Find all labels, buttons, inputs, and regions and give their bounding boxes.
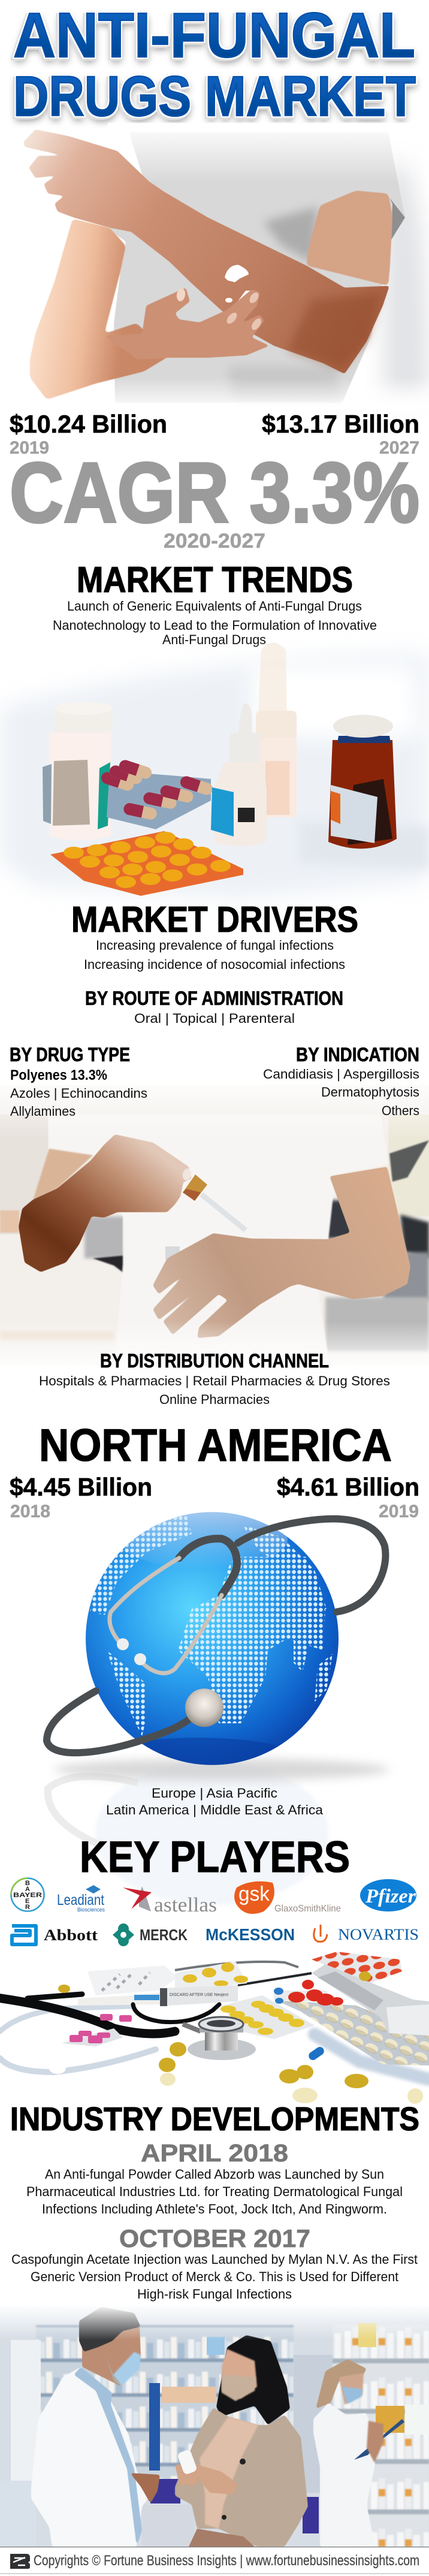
development: October 2017: Caspofungin Acetate Injection was Launched by Mylan N.V. As the First — [11, 2252, 418, 2267]
CAGR period: 2020-2027 — [164, 530, 265, 552]
globe with stethoscope — [47, 1511, 385, 1774]
north america 2019 — [277, 1473, 419, 1521]
market trends heading: MARKET TRENDS — [77, 560, 353, 600]
by route of administration: BY ROUTE OF ADMINISTRATION — [85, 987, 343, 1009]
tall clear bottle — [256, 642, 297, 817]
north america heading: NORTH AMERICA — [39, 1420, 392, 1471]
market trends list: Launch of Generic Equivalents of Anti-Fungal Drugs — [67, 599, 362, 614]
left hand holding dropper — [19, 1134, 192, 1272]
logo: Leadiant: Biosciences — [77, 1907, 105, 1913]
development: April 2018: APRIL 2018 — [141, 2139, 288, 2167]
black tube — [0, 1994, 219, 2034]
north america 2018 — [10, 1473, 152, 1521]
logo: Novartis: NOVARTIS — [338, 1926, 419, 1943]
other regions: Latin America | Middle East & Africa — [106, 1802, 324, 1817]
by distribution channel: BY DISTRIBUTION CHANNEL — [100, 1350, 329, 1372]
logo: Pfizer: Pfizer — [365, 1886, 416, 1907]
pharmacist man — [31, 2307, 160, 2547]
development: October 2017 — [11, 2224, 418, 2302]
market size 2019: 2019 — [10, 438, 49, 458]
logo: Bayer: B — [25, 1880, 30, 1887]
right arm and hand — [153, 1167, 410, 1338]
by indication: Candidiasis | Aspergillosis — [263, 1067, 419, 1082]
logo: Merck — [113, 1923, 188, 1946]
logo: Pfizer — [360, 1879, 416, 1911]
market trends list: Nanotechnology to Lead to the Formulation of Innovative — [53, 618, 377, 633]
market drivers list: Increasing incidence of nosocomial infections — [84, 957, 345, 972]
logo: Abbott — [12, 1926, 98, 1944]
red tablet blister — [312, 1952, 402, 1983]
floor reflections — [0, 2006, 429, 2085]
other regions — [106, 1786, 324, 1817]
logo: astellas: astellas — [154, 1894, 217, 1916]
by drug type: Allylamines — [10, 1104, 75, 1119]
shirt — [50, 1135, 388, 1352]
stethoscope chest piece — [183, 2017, 256, 2060]
logo: Abbott: Abbott — [44, 1926, 98, 1944]
logo: Bayer: A — [25, 1886, 30, 1893]
market trends list: Anti-Fungal Drugs — [162, 632, 266, 647]
yellow pill blister top — [175, 1961, 248, 1988]
stethoscope — [47, 1519, 385, 1753]
cream — [225, 265, 255, 304]
market drivers list — [84, 938, 345, 972]
logo: Bayer: BAYER — [13, 1892, 42, 1899]
by indication — [263, 1044, 419, 1118]
logo: Leadiant — [57, 1885, 105, 1913]
customer woman — [175, 2335, 308, 2547]
by route of administration — [85, 987, 343, 1026]
logo: GSK: gsk — [238, 1883, 270, 1905]
market drivers list: Increasing prevalence of fungal infections — [96, 938, 334, 953]
steel tube — [175, 1962, 298, 1970]
pocket items — [84, 1216, 126, 1275]
photo: medicine bottles and pills — [0, 642, 429, 899]
key players heading: KEY PLAYERS — [80, 1833, 350, 1882]
white blister — [87, 1965, 178, 1995]
red capsules — [274, 1980, 343, 2006]
blister of capsules — [99, 759, 214, 829]
by indication: Others — [382, 1103, 419, 1118]
by indication: Dermatophytosis — [321, 1085, 419, 1100]
dropper bottle — [211, 703, 267, 846]
logo: GSK — [234, 1882, 341, 1914]
market drivers heading: MARKET DRIVERS — [71, 899, 358, 940]
by drug type — [10, 1044, 147, 1119]
market size 2027: 2027 — [379, 438, 419, 458]
footer logo — [10, 2554, 30, 2569]
development: April 2018 — [26, 2139, 403, 2216]
development: April 2018: Infections Including Athlete's Foot, Jock Itch, And Ringworm. — [42, 2201, 387, 2216]
photo: stethoscope, syringes and pills — [0, 1952, 429, 2104]
orange blister of tablets — [50, 831, 243, 896]
globe reflection and shadow — [48, 1759, 389, 1905]
by distribution channel: Hospitals & Pharmacies | Retail Pharmacies & Drug Stores — [39, 1373, 390, 1388]
logo: Leadiant: Leadiant — [57, 1892, 104, 1908]
cream tablet blister — [274, 2000, 429, 2065]
shirt — [108, 123, 413, 403]
north america 2018: $4.45 Billion — [10, 1473, 152, 1501]
title — [13, 0, 416, 128]
logo: GSK: GlaxoSmithKline — [274, 1904, 341, 1914]
globe — [86, 1511, 339, 1774]
by drug type: BY DRUG TYPE — [10, 1044, 130, 1065]
logo: Bayer: R — [25, 1904, 30, 1911]
development: October 2017: Generic Version Product of Merck & Co. This is Used for Different — [31, 2269, 398, 2284]
north america 2019: $4.61 Billion — [277, 1473, 419, 1501]
lower hand — [104, 288, 270, 360]
market trends list — [53, 599, 377, 647]
by drug type: Azoles | Echinocandins — [10, 1086, 147, 1101]
photo: pharmacy scene — [0, 2304, 429, 2547]
right upper arm — [306, 191, 392, 286]
by drug type: Polyenes 13.3% — [10, 1067, 107, 1083]
logo: Merck: MERCK — [140, 1926, 188, 1944]
by route of administration: Oral | Topical | Parenteral — [134, 1011, 295, 1026]
market size 2027 — [262, 410, 419, 458]
north america 2018: 2018 — [10, 1502, 50, 1521]
logo: Bayer — [11, 1878, 44, 1911]
dropper — [183, 1174, 246, 1230]
small bottle — [165, 1246, 180, 1260]
development: October 2017: OCTOBER 2017 — [119, 2224, 310, 2252]
development: April 2018: Pharmaceutical Industries Ltd. for Treating Dermatological Fungal — [26, 2184, 403, 2199]
logo: astellas — [123, 1886, 217, 1916]
yellow tablet blister — [220, 1995, 315, 2039]
pink pills — [62, 2014, 132, 2046]
photo: man with dropper — [0, 1099, 429, 1354]
development: April 2018: An Anti-fungal Powder Called Abzorb was Launched by Sun — [45, 2167, 384, 2182]
white pill bottle — [43, 702, 113, 840]
logo: Novartis — [314, 1925, 419, 1943]
loose capsules — [49, 1971, 423, 2104]
logo: McKesson: McKESSON — [206, 1925, 295, 1944]
market size 2019: $10.24 Billion — [10, 410, 167, 438]
development: October 2017: High-risk Fungal Infections — [137, 2287, 292, 2302]
left arm — [30, 219, 170, 400]
amber bottle — [328, 715, 397, 848]
syringe left — [78, 1985, 238, 2006]
syringe left: DISCARD AFTER USE Neoject — [170, 1993, 228, 1997]
footer — [0, 2547, 429, 2574]
other regions: Europe | Asia Pacific — [152, 1786, 277, 1801]
logo: Bayer: E — [25, 1898, 29, 1905]
market size 2027: $13.17 Billion — [262, 410, 419, 438]
north america 2019: 2019 — [379, 1502, 419, 1521]
by distribution channel: Online Pharmacies — [159, 1392, 270, 1407]
pharmacist woman — [313, 2359, 404, 2547]
market size 2019 — [10, 410, 167, 458]
raised forearm and hand — [23, 129, 389, 374]
syringe right — [312, 1964, 429, 2036]
by distribution channel — [39, 1350, 390, 1407]
hero photo: arm with cream — [0, 123, 429, 410]
